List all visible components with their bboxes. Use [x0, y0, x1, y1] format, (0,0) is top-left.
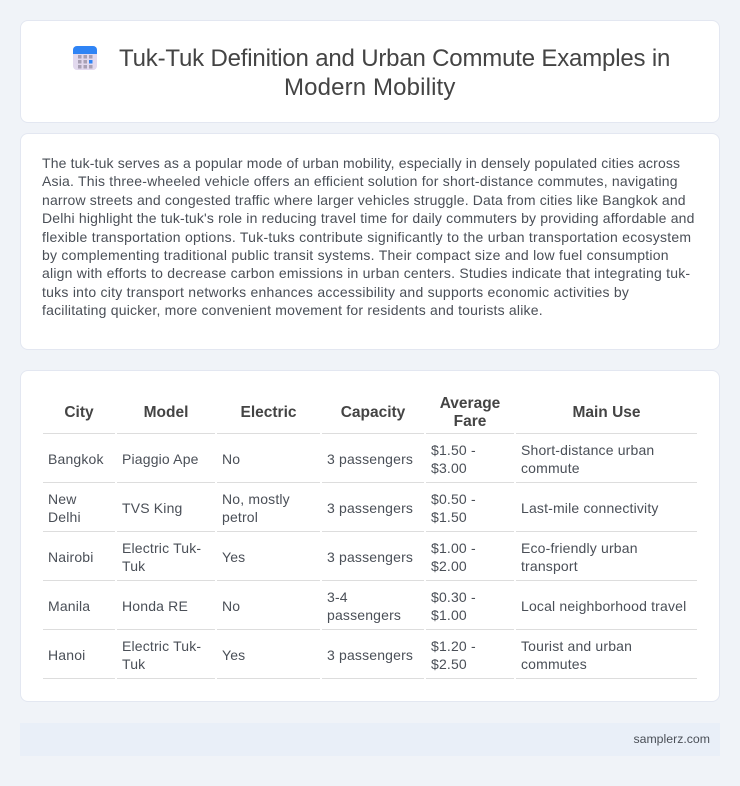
text block: description paragraph: align with efforts to decrease carbon emissions in urban centers. Studies indicate that integrating tuk-	[42, 265, 690, 281]
table: tuk-tuk models by city: $3.00	[431, 460, 467, 476]
title	[119, 45, 670, 101]
table: tuk-tuk models by city: 3 passengers	[327, 500, 413, 516]
table: tuk-tuk models by city: $1.00 -	[431, 540, 476, 556]
table: tuk-tuk models by city: 3 passengers	[327, 451, 413, 467]
text block: description paragraph: The tuk-tuk serves as a popular mode of urban mobility, especially in densely populated cities across	[42, 155, 680, 171]
table: tuk-tuk models by city: $0.50 -	[431, 491, 476, 507]
table: tuk-tuk models by city: $1.00	[431, 607, 467, 623]
table: tuk-tuk models by city: Yes	[222, 549, 245, 565]
table: tuk-tuk models by city: No	[222, 451, 240, 467]
table: tuk-tuk models by city: $2.00	[431, 558, 467, 574]
text block: description paragraph: tuks into city transport networks enhances accessibility and supports economic activities by	[42, 284, 629, 300]
text block: description paragraph: narrow streets and congested traffic where larger vehicles struggle. Data from cities like Bangkok and	[42, 192, 686, 208]
table: tuk-tuk models by city: Nairobi	[48, 549, 94, 565]
table: tuk-tuk models by city: Eco-friendly urban	[521, 540, 638, 556]
title: Modern Mobility	[284, 74, 456, 101]
table: tuk-tuk models by city: Tourist and urban	[521, 638, 632, 654]
table: tuk-tuk models by city: No, mostly	[222, 491, 290, 507]
table: tuk-tuk models by city: New	[48, 491, 77, 507]
table: tuk-tuk models by city: Short-distance urban	[521, 442, 654, 458]
table: tuk-tuk models by city: Hanoi	[48, 647, 85, 663]
table: tuk-tuk models by city: Tuk	[122, 656, 145, 672]
text block: description paragraph: Delhi highlight the tuk-tuk's role in reducing travel time for daily commuters by providing affordable and	[42, 210, 695, 226]
table: tuk-tuk models by city: $1.50	[431, 509, 467, 525]
table: tuk-tuk models by city: Delhi	[48, 509, 81, 525]
table: tuk-tuk models by city: Manila	[48, 598, 90, 614]
table: tuk-tuk models by city: Model	[144, 404, 188, 421]
text block: description paragraph: Asia. This three-wheeled vehicle offers an efficient solution for short-distance commutes, navigating	[42, 173, 678, 189]
text block: description paragraph: facilitating quicker, more convenient movement for residents and tourists alike.	[42, 302, 543, 318]
table: tuk-tuk models by city: $0.30 -	[431, 589, 476, 605]
panel: header	[20, 20, 720, 123]
table: tuk-tuk models by city: 3 passengers	[327, 647, 413, 663]
table: tuk-tuk models by city: Last-mile connectivity	[521, 500, 659, 516]
table: tuk-tuk models by city: Yes	[222, 647, 245, 663]
table: tuk-tuk models by city: Local neighborhood travel	[521, 598, 686, 614]
table: tuk-tuk models by city: Main Use	[572, 404, 641, 421]
table: tuk-tuk models by city: $2.50	[431, 656, 467, 672]
table: tuk-tuk models by city: Fare	[454, 413, 486, 430]
panel: comparison table	[20, 370, 720, 702]
table: tuk-tuk models by city: 3 passengers	[327, 549, 413, 565]
table: tuk-tuk models by city: Tuk	[122, 558, 145, 574]
table: tuk-tuk models by city: transport	[521, 558, 578, 574]
table: tuk-tuk models by city: Average	[440, 395, 500, 412]
table: tuk-tuk models by city: $1.50 -	[431, 442, 476, 458]
table: tuk-tuk models by city: Honda RE	[122, 598, 188, 614]
table: tuk-tuk models by city: Capacity	[341, 404, 405, 421]
table: tuk-tuk models by city: Electric	[240, 404, 296, 421]
table: tuk-tuk models by city: Piaggio Ape	[122, 451, 199, 467]
table: tuk-tuk models by city: $1.20 -	[431, 638, 476, 654]
table: tuk-tuk models by city	[43, 395, 697, 679]
title: Tuk-Tuk Definition and Urban Commute Examples in	[119, 45, 670, 72]
text block: description paragraph	[42, 155, 695, 318]
text block: description paragraph: by complementing traditional public transit systems. Their compact size and low fuel consumption	[42, 247, 669, 263]
table: tuk-tuk models by city: commute	[521, 460, 580, 476]
table: tuk-tuk models by city: City	[64, 404, 94, 421]
table: tuk-tuk models by city: commutes	[521, 656, 587, 672]
table: tuk-tuk models by city: Electric Tuk-	[122, 638, 201, 654]
table: tuk-tuk models by city: passengers	[327, 607, 401, 623]
icon: calendar	[73, 46, 97, 70]
footer credit: samplerz.com	[633, 732, 710, 746]
table: tuk-tuk models by city: TVS King	[122, 500, 182, 516]
table: tuk-tuk models by city: petrol	[222, 509, 258, 525]
footer	[20, 723, 720, 756]
table: tuk-tuk models by city: Electric Tuk-	[122, 540, 201, 556]
table: tuk-tuk models by city: Bangkok	[48, 451, 104, 467]
panel: description	[20, 133, 720, 350]
table: tuk-tuk models by city: No	[222, 598, 240, 614]
text block: description paragraph: flexible transportation options. Tuk-tuks contribute significantly to the urban transportation ecosystem	[42, 229, 691, 245]
table: tuk-tuk models by city: 3-4	[327, 589, 348, 605]
